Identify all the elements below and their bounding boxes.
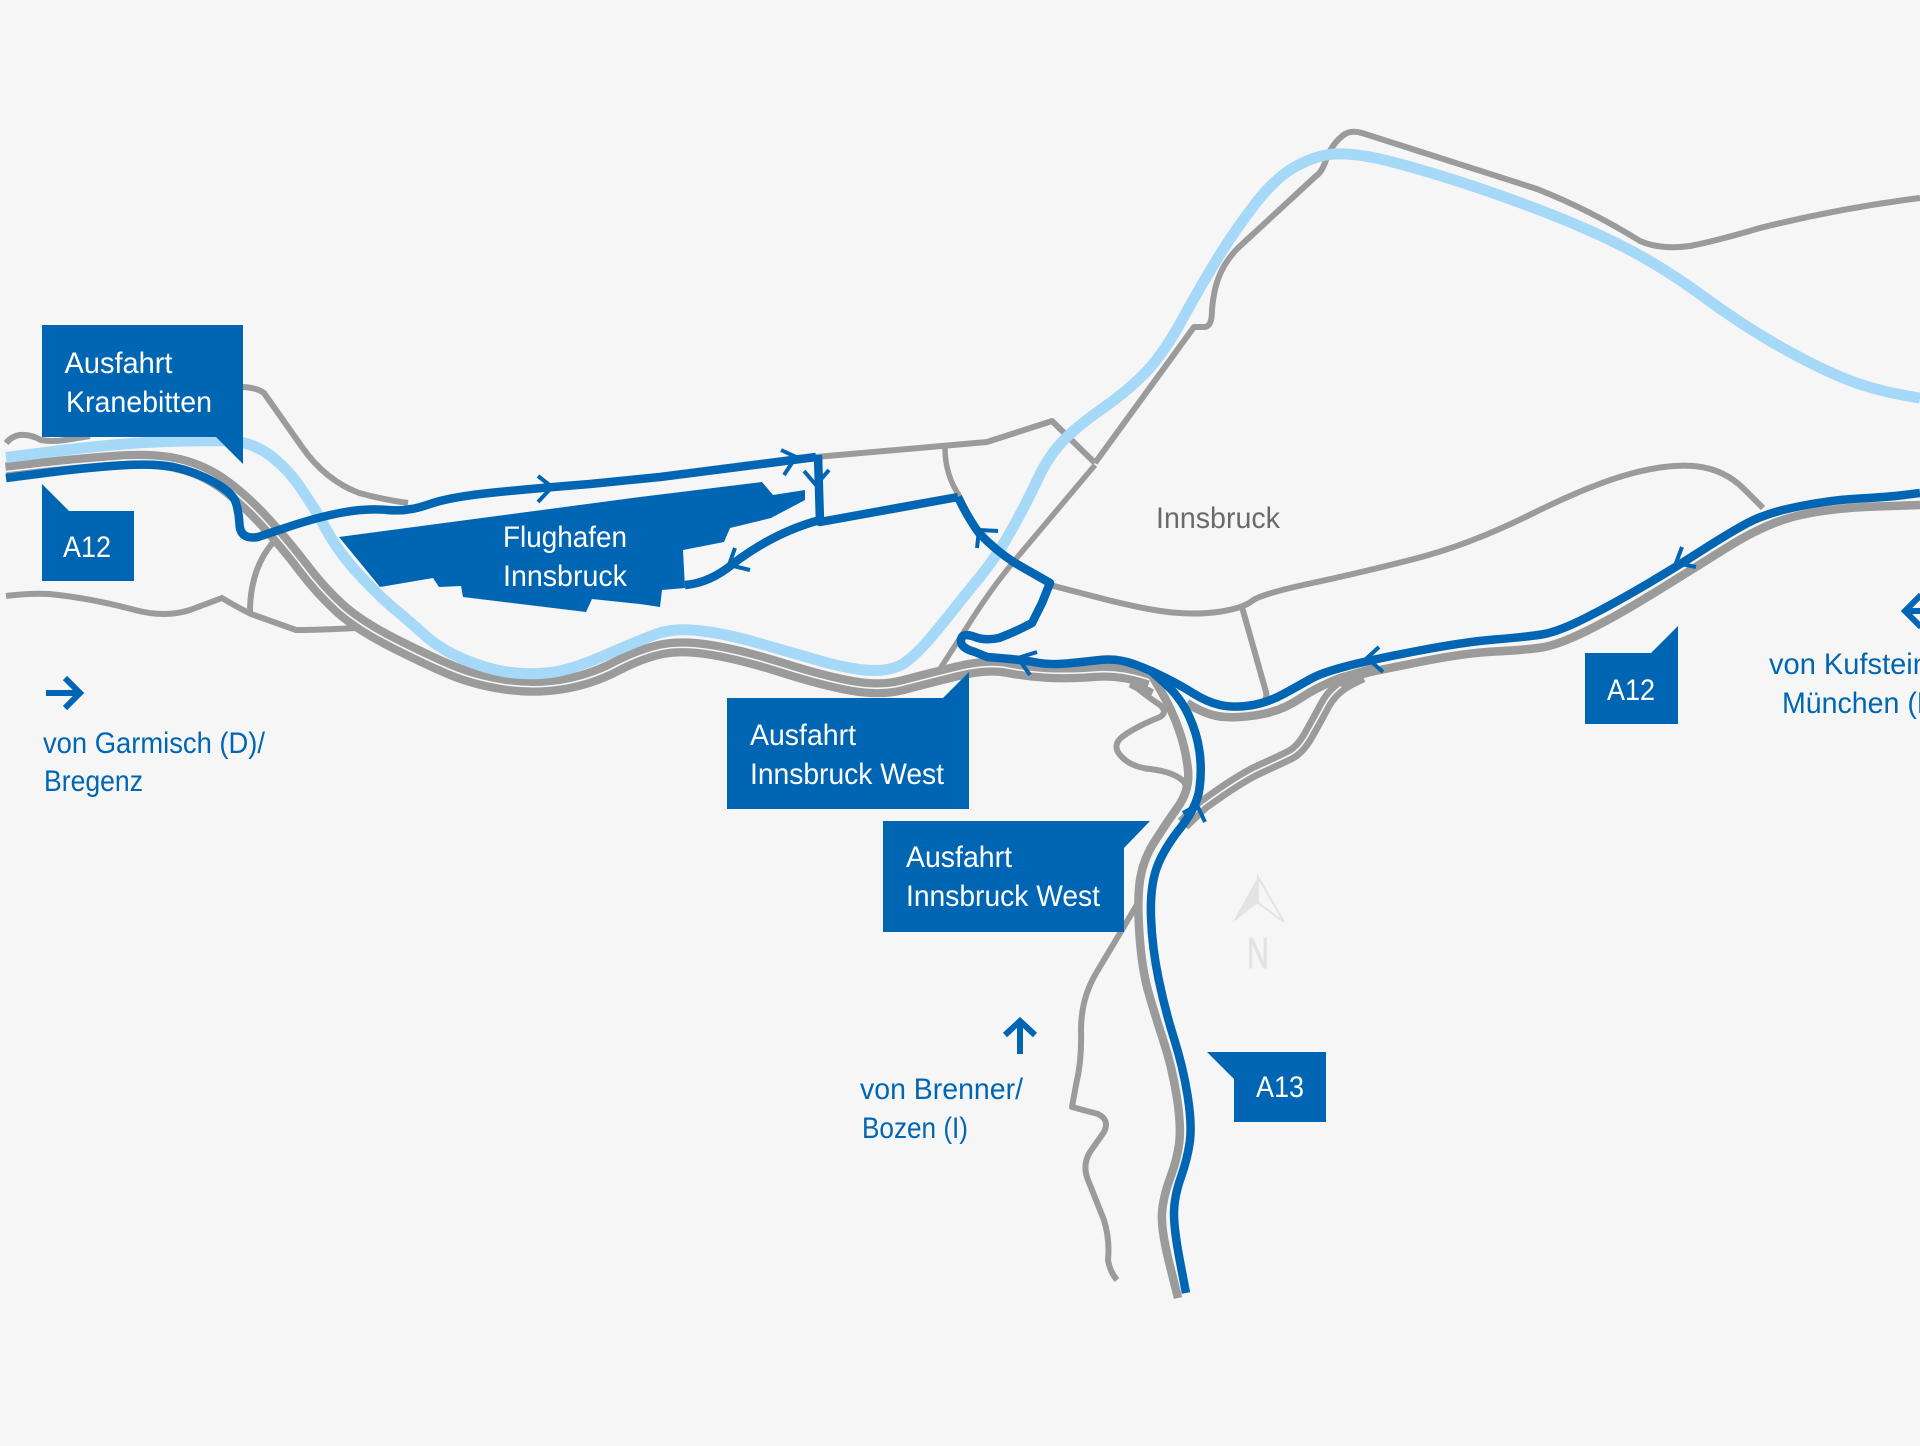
callout: Ausfahrt Innsbruck West (lower) [883, 821, 1150, 932]
callout: Ausfahrt Kranebitten: Kranebitten [66, 386, 212, 419]
motorway A12 and A13 carriageways [6, 460, 1920, 1298]
callout: Ausfahrt Innsbruck West (upper) [727, 672, 969, 809]
river Inn [6, 154, 1920, 674]
callout: Ausfahrt Kranebitten [42, 325, 243, 464]
airport building shape [339, 482, 805, 612]
blue route from the east and the airport loop [958, 493, 1920, 707]
callout: Ausfahrt Innsbruck West (lower): Innsbruck West [906, 880, 1101, 913]
label: Flughafen Innsbruck: Innsbruck [503, 560, 628, 593]
label: Innsbruck city: Innsbruck [1156, 502, 1281, 535]
route direction arrowheads [538, 450, 1696, 822]
callout: A12 west: A12 [63, 531, 111, 564]
callout: Ausfahrt Innsbruck West (lower): Ausfahrt [906, 841, 1013, 874]
blue route A13 from the south [1150, 670, 1201, 1293]
callout: A13 [1207, 1052, 1326, 1122]
label: Flughafen Innsbruck [503, 521, 628, 593]
origin: from Brenner / Bozen: Bozen (I) [862, 1112, 968, 1145]
origin: from Garmisch / Bregenz [43, 678, 266, 798]
icon: north arrow: N [1247, 929, 1269, 978]
origin: from Kufstein / München [1769, 595, 1920, 720]
secondary roads [6, 132, 1920, 1280]
origin: from Brenner / Bozen [860, 1021, 1035, 1145]
callout: Ausfahrt Innsbruck West (upper): Ausfahrt [750, 719, 857, 752]
callout: A13: A13 [1256, 1071, 1304, 1104]
icon: north arrow [1233, 877, 1284, 978]
origin: from Brenner / Bozen: von Brenner/ [860, 1073, 1024, 1106]
origin: from Garmisch / Bregenz: Bregenz [44, 765, 143, 798]
callout: A12 east: A12 [1607, 674, 1655, 707]
callout: Ausfahrt Innsbruck West (upper): Innsbruck West [750, 758, 945, 791]
callout: A12 west [42, 484, 134, 581]
blue route from the west [6, 455, 958, 585]
label: Flughafen Innsbruck: Flughafen [503, 521, 627, 554]
origin: from Garmisch / Bregenz: von Garmisch (D)/ [43, 727, 266, 760]
callout: A12 east [1585, 626, 1678, 724]
callout: Ausfahrt Kranebitten: Ausfahrt [64, 347, 173, 380]
